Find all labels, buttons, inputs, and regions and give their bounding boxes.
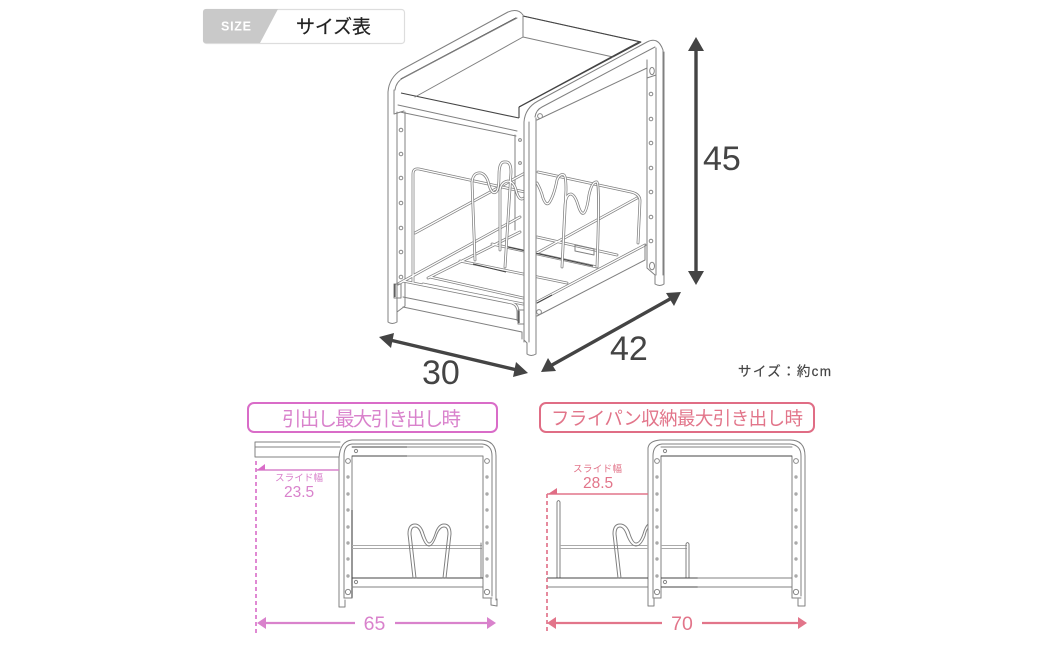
heading: size table: サイズ表 — [296, 16, 371, 38]
slide width callout: 23.5: 23.5 — [284, 484, 314, 501]
panel: maximum drawer extension — [248, 403, 497, 635]
unit note: サイズ：約cm — [738, 364, 831, 379]
slide width callout: 23.5: スライド幅 — [275, 472, 323, 484]
panel title — [248, 403, 497, 432]
slide width callout: 28.5 — [547, 463, 648, 633]
dimension arrow: 70: 70 — [671, 613, 693, 635]
panel title — [540, 403, 814, 432]
top tray — [401, 16, 641, 118]
heading: size table — [203, 9, 404, 44]
slide width callout: 28.5: スライド幅 — [573, 463, 622, 475]
wire rack frames and slide rails — [394, 169, 645, 339]
arrow: depth 42 — [541, 292, 681, 372]
back-left post and arch — [388, 11, 525, 324]
dimension arrow: 65 — [257, 613, 496, 635]
panel: maximum extension with frying pan storage — [540, 403, 814, 635]
arrow: width 30 — [379, 333, 528, 392]
panel title: 引出し最大引き出し時 — [282, 408, 461, 430]
panel title: フライパン収納最大引き出し時 — [551, 408, 803, 429]
dimension arrow: 70 — [547, 613, 807, 635]
back-right post — [537, 48, 664, 286]
slide width callout: 23.5 — [256, 461, 339, 633]
rack front view, pan storage extended — [547, 440, 805, 606]
rack front view, drawer extended — [255, 440, 497, 607]
front-right post and arch — [519, 40, 663, 355]
slide width callout: 28.5: 28.5 — [583, 475, 613, 492]
heading: size table: SIZE — [221, 20, 251, 34]
dimension arrow: 65: 65 — [364, 613, 385, 635]
main product illustration: sliding rack — [388, 11, 664, 356]
pan holders — [472, 162, 598, 267]
arrow: width 30: 30 — [422, 354, 460, 392]
arrow: height 45: 45 — [703, 140, 741, 178]
arrow: depth 42: 42 — [610, 330, 648, 368]
arrow: height 45 — [688, 37, 741, 285]
